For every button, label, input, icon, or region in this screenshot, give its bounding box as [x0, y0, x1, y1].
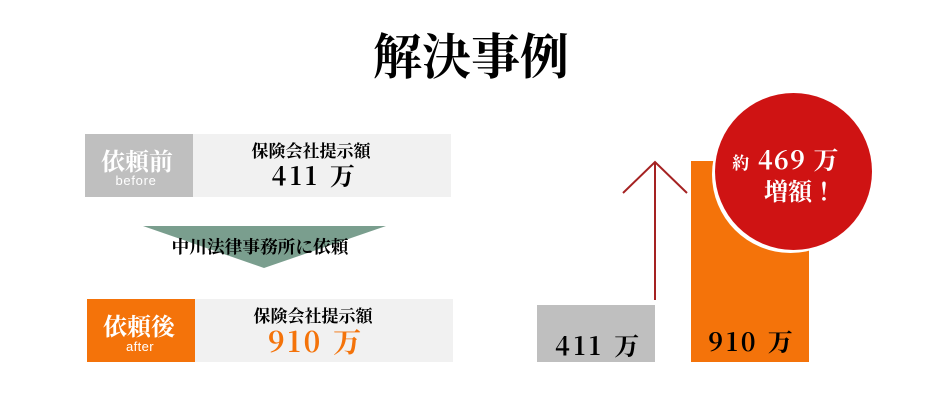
- badge line 2: 増額！: [764, 172, 836, 207]
- arrow: up: [622, 160, 688, 300]
- after caption: 保険会社提示額: [254, 302, 372, 327]
- after label box: [87, 299, 195, 362]
- panel: before: [85, 134, 451, 197]
- bar chart: [537, 93, 872, 363]
- before label box: [85, 134, 193, 197]
- title: 解決事例: [373, 19, 569, 89]
- badge line 1: 約 469 万: [732, 141, 840, 177]
- before label text: 依頼前: [101, 142, 173, 177]
- triangle label: 中川法律事務所に依頼: [172, 234, 348, 259]
- bar: after: [691, 161, 809, 362]
- after sublabel: after: [126, 339, 154, 354]
- after label text: 依頼後: [103, 307, 175, 342]
- arrow: down triangle: [143, 226, 386, 268]
- panel: after: [87, 299, 453, 362]
- before sublabel: before: [115, 173, 157, 188]
- after amount: 910 万: [268, 321, 364, 361]
- before caption: 保険会社提示額: [252, 137, 370, 162]
- callout: increase badge: [715, 93, 872, 250]
- before amount: 411 万: [272, 157, 358, 193]
- bar before value: 411 万: [555, 327, 643, 363]
- bar after value: 910 万: [708, 323, 796, 359]
- bar: before: [537, 305, 655, 362]
